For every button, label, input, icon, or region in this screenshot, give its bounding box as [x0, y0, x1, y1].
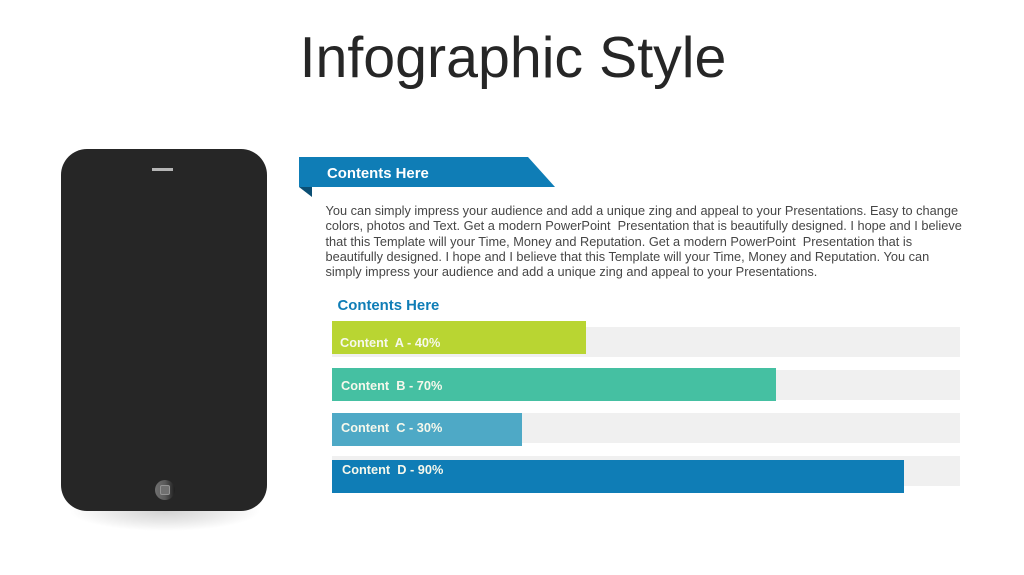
bar: Content D — [332, 456, 960, 493]
banner ribbon shape — [299, 157, 555, 197]
bar: Content A — [332, 321, 960, 357]
icon: smartphone — [61, 149, 267, 528]
banner: Contents Here — [299, 157, 555, 197]
bar: Content D: Content D - 90% — [342, 462, 443, 477]
phone body — [61, 149, 267, 511]
banner heading: Contents Here — [327, 166, 429, 182]
text block: description — [326, 203, 962, 279]
heading: chart: Contents Here — [338, 298, 439, 314]
bar: Content A: Content A - 40% — [340, 335, 440, 350]
text block: description: beautifully designed. I hope and I believe that this Template will your Time, Money and Reputation. You can — [326, 249, 929, 264]
home button — [155, 480, 175, 500]
home button square — [160, 485, 170, 495]
bar: Content B: Content B - 70% — [341, 378, 442, 392]
text block: description: that this Template will your Time, Money and Reputation. Get a modern PowerPoint Presentation that is — [326, 234, 912, 248]
bar: Content C: Content C - 30% — [341, 420, 442, 435]
bar chart — [332, 321, 960, 493]
text block: description: simply impress your audience and add a unique zing and appeal to your Presentations. — [326, 264, 817, 279]
phone shadow — [70, 491, 260, 531]
text block: description: You can simply impress your audience and add a unique zing and appeal to your Presentations. Easy to change — [326, 203, 958, 218]
bar: Content C — [332, 413, 960, 446]
text block: description: colors, photos and Text. Get a modern PowerPoint Presentation that is beautifully designed. I hope and I believe — [326, 218, 962, 233]
speaker — [152, 168, 173, 171]
title: Infographic Style — [300, 26, 726, 90]
bar: Content B — [332, 368, 960, 401]
